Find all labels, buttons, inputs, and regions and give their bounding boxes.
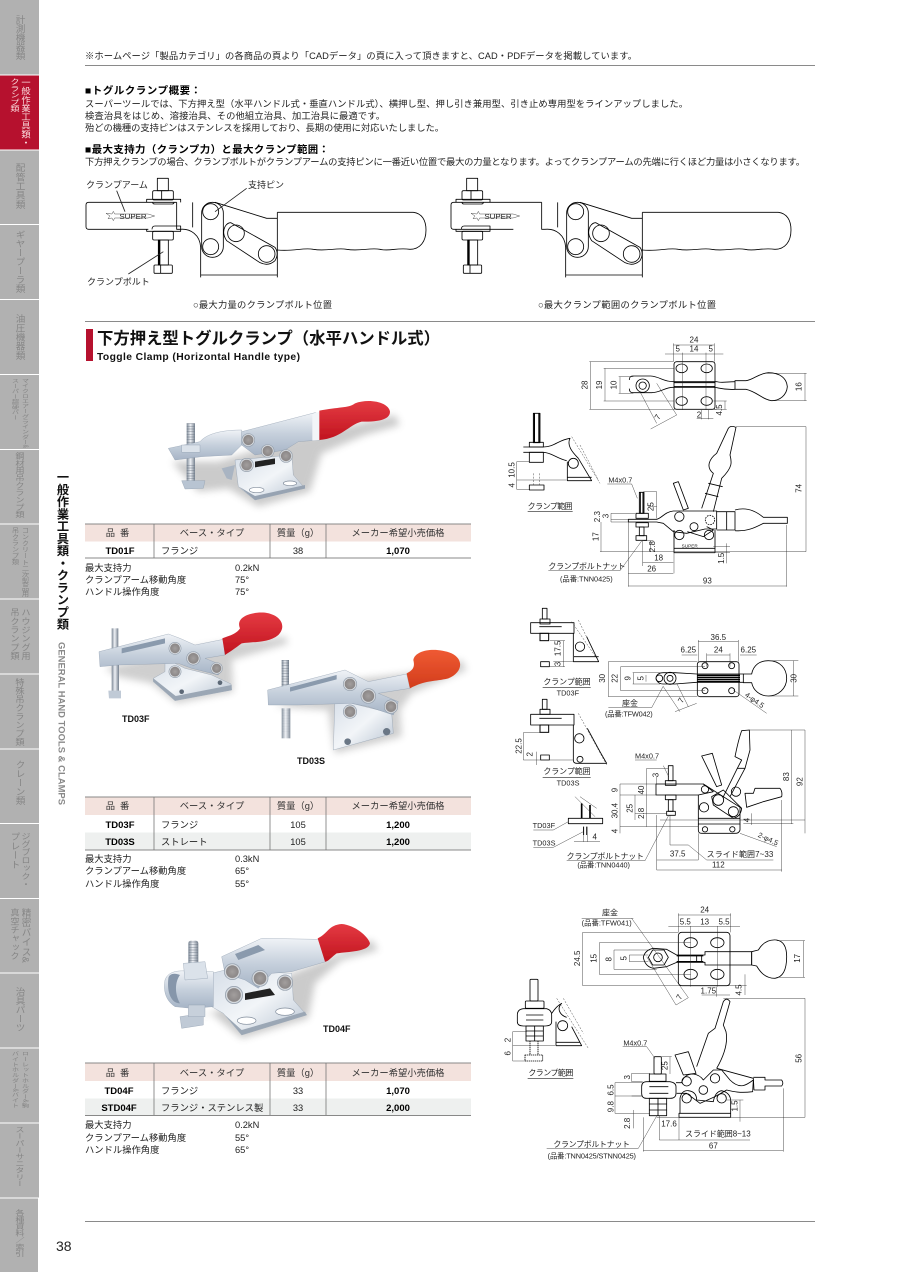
specs: TD04: 65° — [235, 1145, 249, 1155]
technical drawing: TD03: クランプ範囲 — [543, 676, 591, 686]
technical drawing: TD04F: 67 — [709, 1141, 718, 1150]
technical drawing: TD04F: 25 — [661, 1061, 670, 1070]
diagram: maximum force bolt position — [86, 178, 426, 310]
technical drawing: TD04F: 5.5 — [680, 917, 691, 926]
sidebar navigation: クレーン類 — [14, 760, 25, 806]
spec table: TD04: 品番 — [106, 1067, 134, 1078]
technical drawing: TD01F: 26 — [647, 564, 657, 573]
specs: TD03: 55° — [235, 879, 249, 889]
technical drawing: TD03: 2-φ4.5 — [756, 830, 780, 848]
technical drawing: TD03: 40 — [637, 785, 646, 794]
technical drawing: TD04F: 2 — [504, 1037, 513, 1042]
sidebar navigation: スーパー超硬バー — [12, 378, 20, 420]
technical drawing: TD04F: 13 — [700, 917, 710, 926]
technical drawing: TD01F: 18 — [654, 554, 664, 563]
spec table: TD04: 質量（g） — [277, 1067, 319, 1078]
technical drawing: TD01F: 1.5 — [717, 552, 726, 564]
technical drawing: TD04F: 17 — [793, 953, 802, 963]
clamp force text block: ■最大支持力（クランプ力）と最大クランプ範囲： — [85, 143, 329, 156]
sidebar navigation: クランプ類 — [9, 78, 20, 113]
technical drawing: TD03: 37.5 — [670, 850, 686, 859]
technical drawing: TD03: 22.5 — [514, 738, 523, 754]
diagram: maximum force bolt position: 支持ピン — [248, 179, 284, 190]
technical drawing: TD03: 2.8 — [637, 807, 646, 819]
diagram: maximum force bolt position: クランプアーム — [86, 180, 148, 190]
spec table: TD01F: 38 — [293, 546, 303, 556]
sidebar navigation: スーパーサニタリー — [14, 1126, 25, 1187]
vertical section heading: GENERAL HAND TOOLS & CLAMPS — [56, 642, 68, 805]
technical drawing: TD04F: (品番:TFW041) — [582, 918, 632, 927]
technical drawing: TD03: 4 — [592, 832, 597, 841]
spec table: TD04: フランジ・ステンレス製 — [161, 1102, 263, 1113]
spec table: TD01F — [85, 524, 471, 558]
technical drawing: TD04F: クランプボルトナット — [553, 1140, 630, 1149]
technical drawing: TD01F: 93 — [703, 576, 712, 585]
specs: TD03: 65° — [235, 866, 249, 876]
technical drawing: TD03: TD03S — [533, 839, 556, 848]
technical drawing: TD03: クランプボルトナット — [567, 852, 644, 861]
specs: TD04: ハンドル操作角度 — [85, 1144, 159, 1155]
technical drawing: TD04F: 6.5 — [606, 1084, 615, 1096]
sidebar navigation: 各種資料／索引 — [14, 1208, 25, 1258]
technical drawing: TD04F: 1.75 — [701, 986, 717, 995]
specs: TD01F: 75° — [235, 587, 249, 597]
technical drawing: TD04F: 8 — [604, 957, 613, 962]
spec table: TD03: 品番 — [106, 800, 134, 811]
spec table: TD03: フランジ — [161, 820, 198, 830]
sidebar navigation: ハウジング用 — [20, 608, 31, 661]
sidebar navigation: 計測機器類 — [14, 14, 25, 61]
technical drawing: TD03: M4x0.7 — [635, 751, 659, 760]
technical drawing: TD03: 25 — [625, 803, 634, 813]
technical drawing: TD01F: 2.8 — [648, 541, 657, 552]
sidebar navigation: 吊クランプ類 — [11, 527, 20, 566]
spec table: TD01F: 品番 — [106, 527, 134, 538]
technical drawing: TD03: (品番:TNN0440) — [577, 861, 630, 870]
specs: TD04: 0.2kN — [235, 1120, 259, 1130]
technical drawing: TD01F: 10 — [610, 380, 619, 389]
technical drawing: TD04F: 56 — [795, 1053, 804, 1063]
spec table: TD04: 2,000 — [386, 1103, 410, 1114]
technical drawing: TD04F: M4x0.7 — [623, 1038, 647, 1047]
spec table: TD03: 質量（g） — [277, 800, 319, 811]
technical drawing: TD03: 7 — [676, 696, 686, 705]
technical drawing: TD01F: 25 — [647, 502, 656, 511]
technical drawing: TD04F: 9.8 — [606, 1101, 615, 1112]
sidebar navigation: ローレットホルダー&駒 — [22, 1051, 30, 1109]
sidebar navigation: コンクリート二次製品用 — [22, 527, 30, 598]
main title: Toggle Clamp (Horizontal Handle type) — [97, 352, 300, 363]
specs: TD01F: クランプアーム移動角度 — [85, 574, 186, 585]
technical drawing: TD01F: クランプボルトナット — [548, 562, 626, 571]
technical drawing: TD04F: 7 — [674, 992, 685, 1001]
technical drawing: TD03: 9 — [610, 787, 619, 792]
specs: TD01F: 75° — [235, 575, 249, 585]
technical drawing: TD03: スライド範囲7~33 — [707, 849, 774, 859]
technical drawing: TD01F: SUPER — [682, 543, 698, 548]
sidebar navigation: 油圧機器類 — [14, 313, 25, 361]
photo: TD04F clamp — [164, 924, 378, 1038]
sidebar navigation: 治具パーツ — [14, 986, 25, 1032]
spec table: TD04: ベース・タイプ — [180, 1068, 245, 1078]
technical drawing: TD01F: 10.5 — [508, 462, 517, 478]
sidebar navigation — [0, 0, 39, 1272]
sidebar navigation: ギヤープーラ類 — [14, 230, 25, 294]
sidebar navigation: プレート — [8, 832, 20, 869]
technical drawing: TD01F: 24 — [690, 335, 699, 344]
technical drawing: TD03: 3 — [554, 661, 563, 666]
technical drawing: TD01F: 5 — [675, 345, 680, 354]
model label: TD03S: TD03S — [297, 756, 325, 766]
specs: TD04 — [85, 1119, 259, 1155]
technical drawing: TD01F: 5 — [708, 345, 713, 354]
technical drawing: TD04F: 17.6 — [661, 1120, 677, 1129]
specs: TD01F: 最大支持力 — [85, 562, 132, 573]
technical drawing: TD03: 30 — [790, 673, 799, 683]
vertical section heading — [55, 471, 69, 805]
technical drawing: TD01F: 14 — [690, 345, 699, 354]
spec table: TD03: TD03S — [105, 837, 135, 848]
technical drawing: TD03 — [514, 608, 805, 872]
technical drawing: TD04F: 24 — [700, 906, 710, 915]
technical drawing: TD03: 4 — [611, 828, 620, 833]
spec table: TD04 — [85, 1063, 471, 1116]
specs: TD03: 最大支持力 — [85, 853, 132, 864]
technical drawing: TD04F: 3 — [623, 1075, 632, 1080]
technical drawing: TD03: 112 — [712, 861, 725, 870]
specs: TD01F: 0.2kN — [235, 563, 259, 573]
technical drawing: TD04F: クランプ範囲 — [528, 1068, 573, 1078]
main title: 下方押え型トグルクランプ（水平ハンドル式） — [97, 329, 440, 348]
spec table: TD04: 33 — [293, 1103, 303, 1113]
specs: TD04: クランプアーム移動角度 — [85, 1132, 186, 1143]
spec table: TD01F: メーカー希望小売価格 — [352, 527, 445, 538]
technical drawing: TD04F — [504, 906, 805, 1160]
technical drawing: TD03: 83 — [782, 772, 791, 781]
technical drawing: TD03: 4 — [742, 817, 751, 822]
technical drawing: TD03: 92 — [795, 777, 804, 786]
photo: TD03F clamp — [99, 613, 288, 703]
technical drawing: TD01F: (品番:TNN0425) — [560, 574, 613, 583]
technical drawing: TD01F — [508, 335, 807, 587]
main title — [86, 329, 440, 363]
specs: TD03: クランプアーム移動角度 — [85, 865, 186, 876]
sidebar navigation: 精密バイス& — [20, 907, 31, 964]
technical drawing: TD01F: 7 — [653, 412, 663, 421]
sidebar navigation: 吊クランプ類 — [9, 608, 20, 661]
technical drawing: TD04F: 4.5 — [735, 984, 744, 996]
technical drawing: TD01F: 4 — [508, 483, 517, 488]
technical drawing: TD03: 4-φ4.5 — [743, 690, 766, 710]
specs: TD03: ハンドル操作角度 — [85, 878, 159, 889]
spec table: TD01F: フランジ — [161, 546, 198, 556]
technical drawing: TD01F: クランプ範囲 — [528, 501, 573, 511]
spec table: TD03: 105 — [290, 820, 306, 830]
spec table: TD04: 33 — [293, 1086, 303, 1096]
sidebar navigation: 一般作業工具類・ — [20, 78, 31, 147]
technical drawing: TD03: 座金 — [622, 698, 638, 708]
technical drawing: TD03: 9 — [624, 676, 633, 681]
spec table: TD04: メーカー希望小売価格 — [352, 1067, 445, 1078]
diagram: maximum clamp range bolt position — [451, 178, 791, 310]
technical drawing: TD04F: 15 — [590, 953, 599, 963]
technical drawing: TD01F: 28 — [580, 380, 589, 389]
technical drawing: TD03: 22 — [611, 673, 620, 683]
spec table: TD04: 1,070 — [386, 1086, 410, 1097]
technical drawing: TD03: 3 — [651, 772, 660, 777]
overview text block — [85, 84, 688, 133]
technical drawing: TD03: 2 — [526, 752, 535, 757]
technical drawing: TD03: TD03S — [557, 779, 580, 788]
page number: 38 — [56, 1238, 72, 1254]
specs: TD04: 最大支持力 — [85, 1119, 132, 1130]
specs: TD01F: ハンドル操作角度 — [85, 586, 159, 597]
spec table: TD04: TD04F — [104, 1086, 134, 1097]
diagram: maximum clamp range bolt position: ○最大クランプ範囲のクランプボルト位置 — [538, 299, 716, 310]
technical drawing: TD03: 30 — [598, 673, 607, 683]
spec table: TD03 — [85, 797, 471, 850]
technical drawing: TD04F: 6 — [504, 1051, 513, 1056]
technical drawing: TD04F: 24.5 — [573, 950, 582, 966]
spec table: TD01F: 質量（g） — [277, 527, 319, 538]
technical drawing: TD04F: 2.8 — [623, 1117, 632, 1129]
technical drawing: TD03: 36.5 — [711, 633, 727, 642]
spec table: TD04: フランジ — [161, 1086, 198, 1096]
spec table: TD03: TD03F — [105, 820, 135, 831]
technical drawing: TD01F: 3 — [601, 513, 610, 518]
specs: TD01F — [85, 562, 259, 597]
spec table: TD01F: ベース・タイプ — [180, 528, 245, 538]
technical drawing: TD04F: 5 — [620, 956, 629, 961]
overview text block: ■トグルクランプ概要： — [85, 84, 201, 97]
spec table: TD03: 105 — [290, 837, 306, 847]
specs: TD04: 55° — [235, 1133, 249, 1143]
top note: ※ホームページ「製品カテゴリ」の各商品の頁より「CADデータ」の頁に入って頂きますと、CAD・PDFデータを掲載しています。 — [85, 50, 637, 61]
sidebar navigation: マイクロエアーグラインダー& — [22, 378, 30, 448]
sidebar navigation: 真空チャック — [9, 907, 20, 960]
technical drawing: TD01F: 17 — [592, 532, 601, 541]
technical drawing: TD03: 5 — [636, 676, 645, 681]
sidebar navigation: 配管工具類 — [14, 163, 25, 210]
spec table: TD03: メーカー希望小売価格 — [352, 800, 445, 811]
technical drawing: TD03: 17.5 — [554, 640, 563, 656]
spec table: TD03: ストレート — [161, 837, 208, 847]
spec table: TD03: 1,200 — [386, 837, 410, 848]
specs: TD03: 0.3kN — [235, 854, 259, 864]
technical drawing: TD01F: 16 — [795, 382, 804, 391]
specs: TD03 — [85, 853, 259, 889]
overview text block: 検査治具をはじめ、溶接治具、その他組立治具、加工治具に最適です。 — [85, 110, 385, 121]
technical drawing: TD04F: (品番:TNN0425/STNN0425) — [548, 1151, 636, 1160]
spec table: TD04: STD04F — [101, 1103, 137, 1114]
technical drawing: TD01F: 2 — [697, 410, 702, 419]
technical drawing: TD03: 6.25 — [741, 646, 757, 655]
spec table: TD01F: TD01F — [105, 546, 135, 557]
clamp force text block: 下方押えクランプの場合、クランプボルトがクランプアームの支持ピンに一番近い位置で最大の力量となります。よってクランプアームの先端に行くほど力量は小さくなります。 — [85, 156, 805, 167]
technical drawing: TD03: TD03F — [533, 821, 556, 830]
sidebar navigation: バイトホルダー&バイト — [12, 1051, 20, 1108]
technical drawing: TD01F: 19 — [595, 380, 604, 389]
photo: TD03S clamp — [268, 650, 467, 753]
technical drawing: TD04F: スライド範囲8~13 — [685, 1129, 751, 1139]
technical drawing: TD04F: 1.5 — [730, 1100, 739, 1112]
photo: TD01F clamp — [168, 401, 400, 507]
technical drawing: TD04F: 5.5 — [718, 917, 730, 926]
overview text block: 殆どの機種の支持ピンはステンレスを採用しており、長期の使用に対応いたしました。 — [85, 122, 444, 133]
technical drawing: TD01F: 74 — [795, 483, 804, 493]
technical drawing: TD03: 24 — [714, 646, 723, 655]
technical drawing: TD03: (品番:TFW042) — [605, 710, 653, 719]
technical drawing: TD04F: 座金 — [602, 908, 618, 918]
diagram: maximum force bolt position: クランプボルト — [87, 277, 150, 287]
technical drawing: TD03: クランプ範囲 — [543, 766, 591, 776]
sidebar navigation: 鋼材用吊クランプ類 — [14, 451, 25, 519]
spec table: TD01F: 1,070 — [386, 546, 410, 557]
technical drawing: TD01F: M4x0.7 — [608, 475, 632, 484]
sidebar navigation: ジグブロック・ — [20, 832, 31, 888]
technical drawing: TD03: 6.25 — [681, 646, 697, 655]
technical drawing: TD03: TD03F — [557, 689, 580, 698]
technical drawing: TD01F: 2.3 — [593, 511, 602, 522]
spec table: TD03: ベース・タイプ — [180, 801, 245, 811]
technical drawing: TD03: 30.4 — [611, 802, 620, 818]
vertical section heading: 一般作業工具類・クランプ類 — [55, 471, 69, 631]
model label: TD03F: TD03F — [122, 714, 150, 724]
diagram: maximum force bolt position: ○最大力量のクランプボルト位置 — [193, 299, 332, 310]
spec table: TD03: 1,200 — [386, 820, 410, 831]
clamp force text block — [85, 143, 805, 167]
sidebar navigation: 特殊吊クランプ類 — [14, 677, 25, 747]
technical drawing: TD01F: 4.5 — [715, 404, 724, 416]
overview text block: スーパーツールでは、下方押え型（水平ハンドル式・垂直ハンドル式）、横押し型、押し引き兼用型、引き止め専用型をラインアップしました。 — [85, 98, 688, 109]
model label: TD04F: TD04F — [323, 1024, 351, 1034]
